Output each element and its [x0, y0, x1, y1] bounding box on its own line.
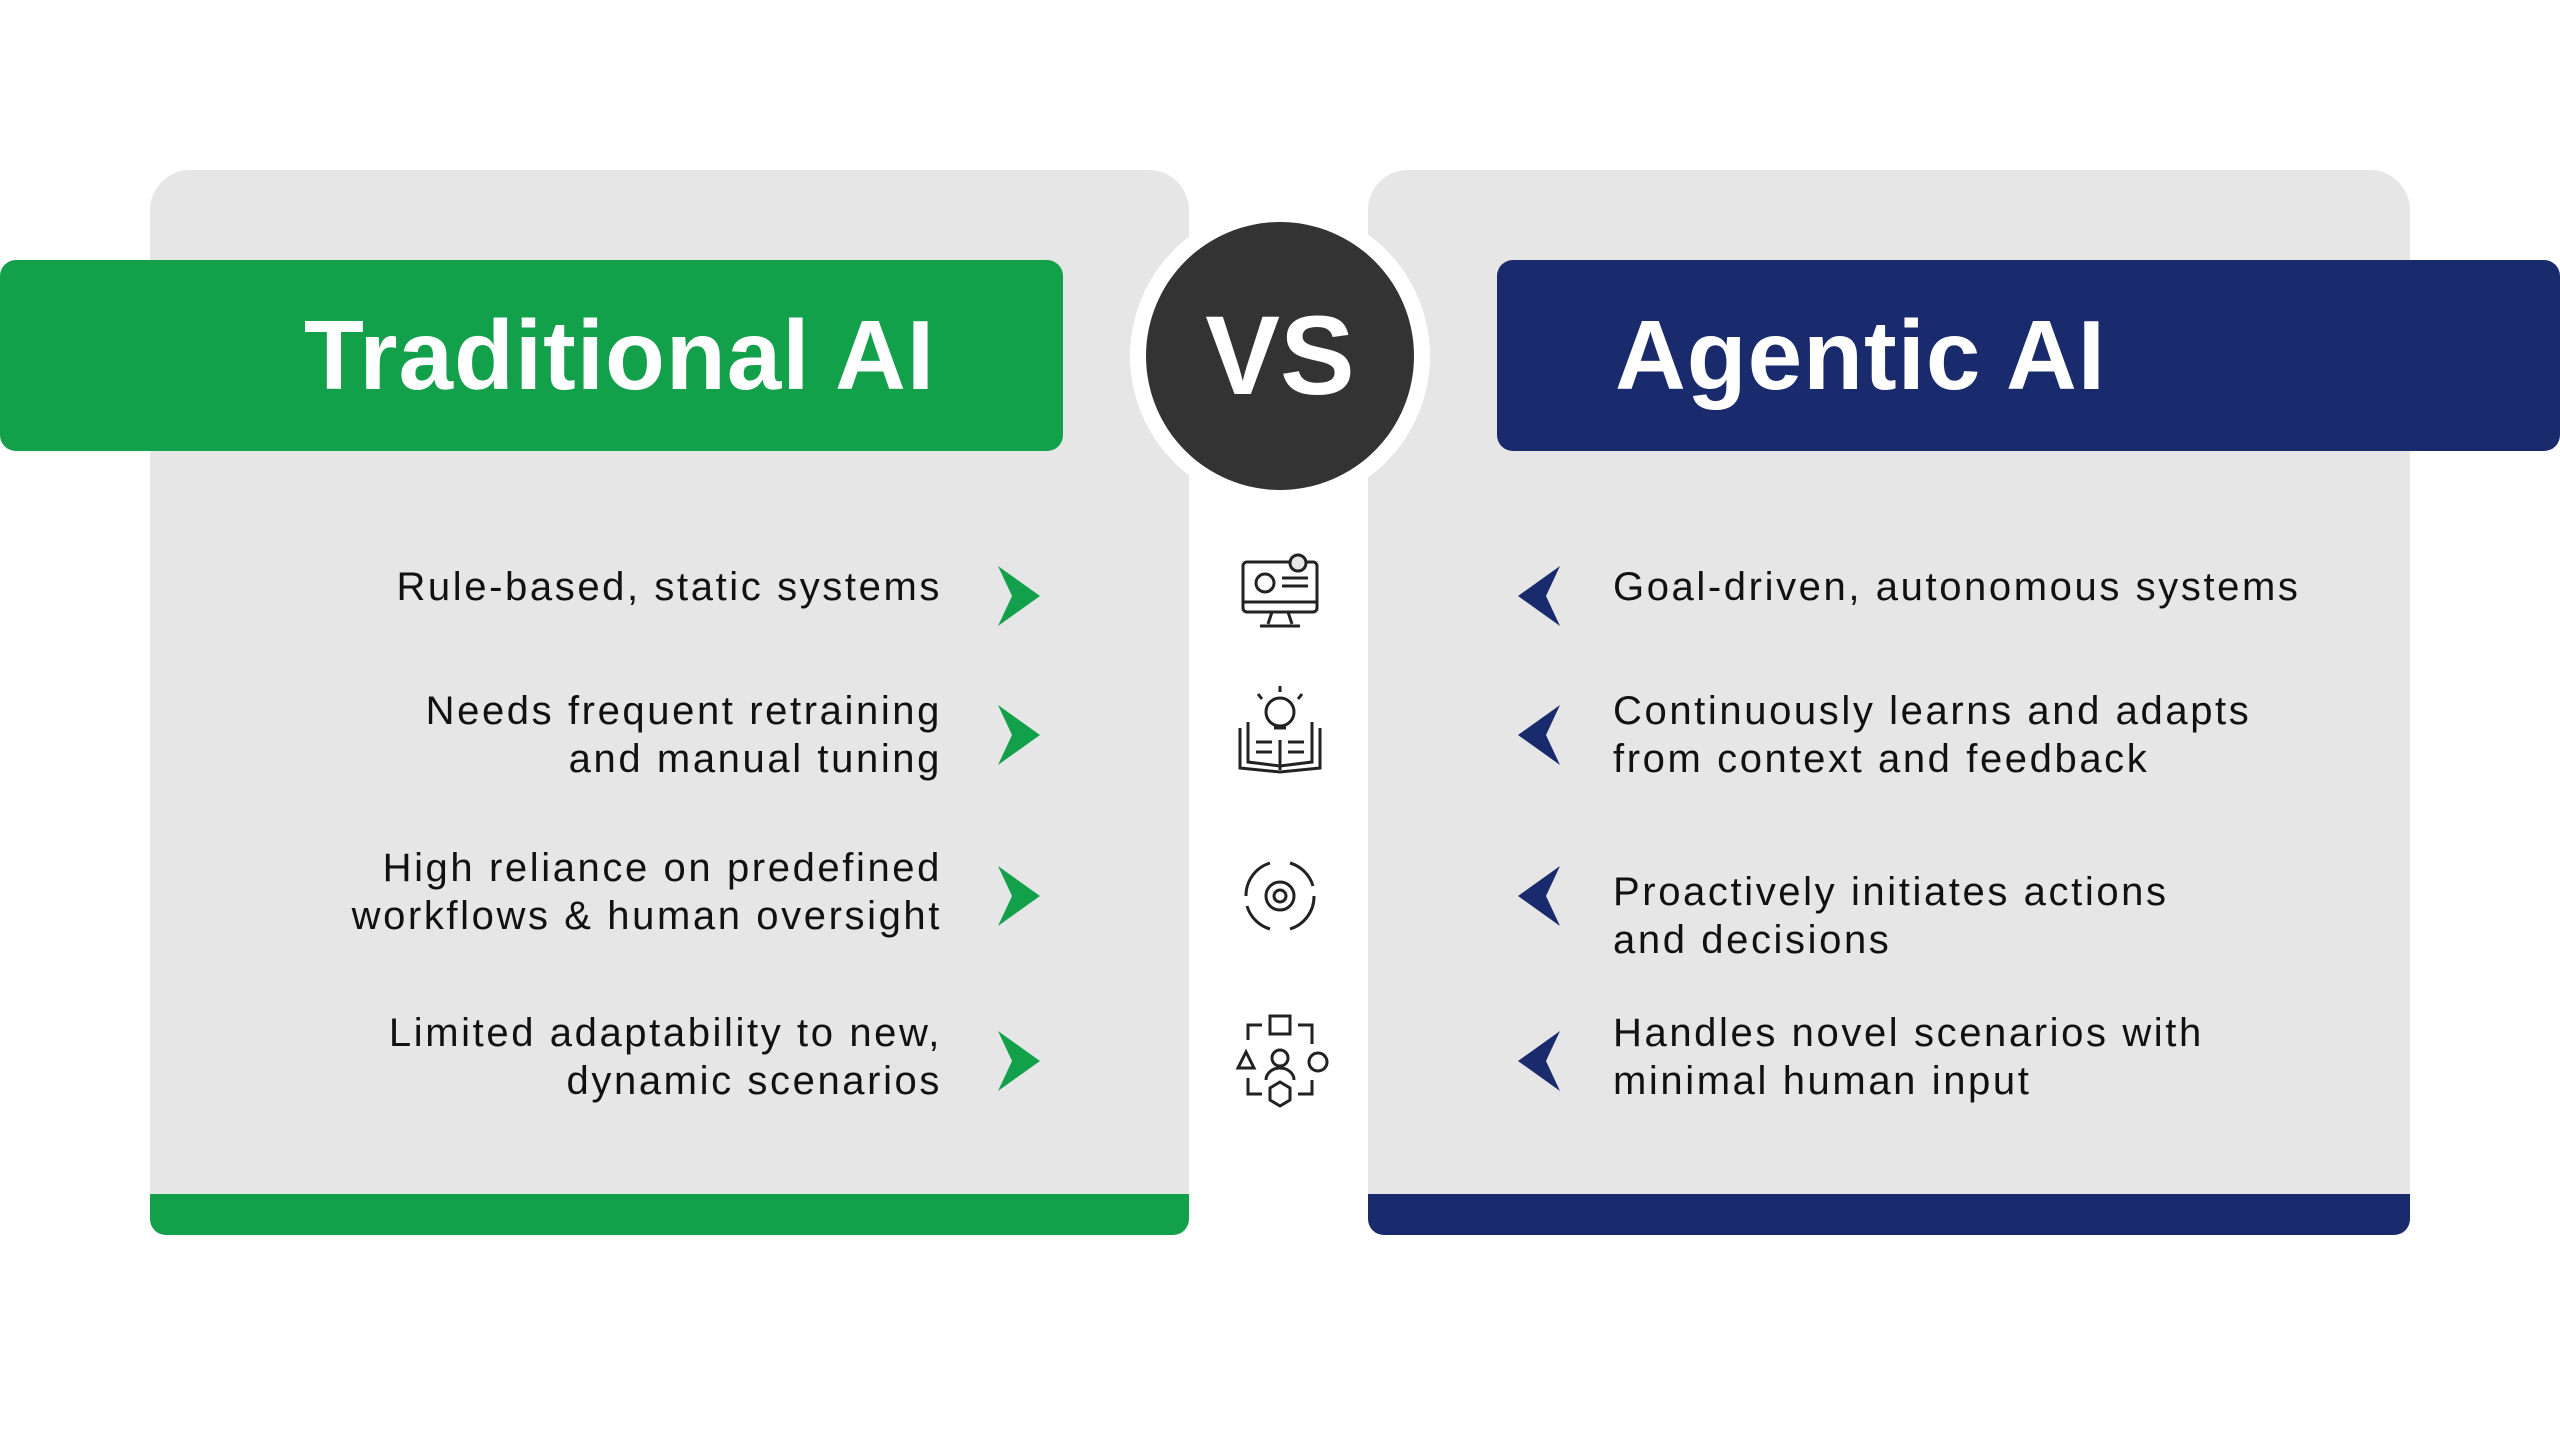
heading: Agentic AI: Agentic AI — [1615, 300, 2106, 410]
right text 4: minimal human input — [1613, 1059, 2031, 1103]
left text 3 — [352, 846, 942, 938]
heading: Traditional AI: Traditional AI — [304, 300, 935, 410]
right text 4 — [1613, 1011, 2204, 1103]
left text 2 — [426, 689, 942, 781]
left text 2: Needs frequent retraining — [426, 689, 942, 733]
left text 2: and manual tuning — [569, 737, 942, 781]
right text 2: from context and feedback — [1613, 737, 2149, 781]
arrows: navy chevrons — [1518, 566, 1560, 1091]
left text 4: dynamic scenarios — [567, 1059, 942, 1103]
icon: workflow shapes — [1238, 1016, 1327, 1106]
icon: gear cycle — [1246, 863, 1314, 929]
left text 4: Limited adaptability to new, — [389, 1011, 942, 1055]
left text 3: workflows & human oversight — [352, 894, 942, 938]
icon: book with bulb — [1240, 686, 1320, 772]
VS badge: VS — [1205, 293, 1355, 418]
left text 4 — [389, 1011, 942, 1103]
heading: Agentic AI — [1497, 260, 2560, 451]
right text 1: Goal-driven, autonomous systems — [1613, 565, 2301, 609]
right text 2 — [1613, 689, 2251, 781]
right text 3: Proactively initiates actions — [1613, 870, 2169, 914]
icon: monitor with gears — [1243, 555, 1317, 626]
left text 1: Rule-based, static systems — [396, 565, 942, 609]
left text 3: High reliance on predefined — [383, 846, 942, 890]
right text 3: and decisions — [1613, 918, 1891, 962]
right text 3 — [1613, 870, 2169, 962]
right text 2: Continuously learns and adapts — [1613, 689, 2251, 733]
VS badge — [1130, 206, 1430, 506]
right text 4: Handles novel scenarios with — [1613, 1011, 2204, 1055]
heading: Traditional AI — [0, 260, 1063, 451]
panel: traditional AI — [150, 170, 1189, 1235]
panel: agentic AI — [1368, 170, 2410, 1235]
